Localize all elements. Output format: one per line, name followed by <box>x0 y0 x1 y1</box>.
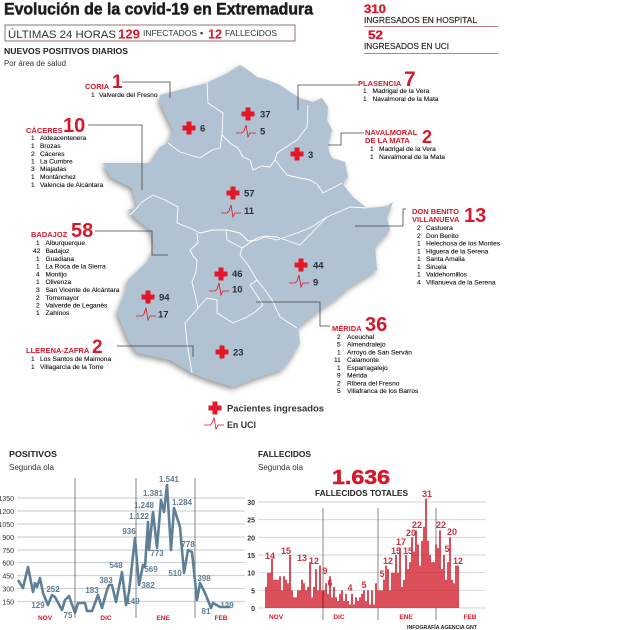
line chart: positives: 778 <box>181 540 195 549</box>
area: Navalmoral de la Mata: NAVALMORAL <box>365 128 418 137</box>
area: Mérida: Arroyo de San Serván <box>347 350 412 356</box>
area: Don Benito-Villanueva: 2 <box>417 233 421 240</box>
legend: Pacientes ingresados <box>227 404 324 414</box>
legend: En UCI <box>227 420 256 431</box>
area: Navalmoral de la Mata: 1 <box>370 146 374 153</box>
bar chart: deaths: 20 <box>247 535 255 542</box>
area: Don Benito-Villanueva: 1 <box>417 272 421 278</box>
bar chart: deaths: 17 <box>396 537 406 547</box>
line chart: positives <box>0 475 245 622</box>
area: Llerena-Zafra: Villagarcía de la Torre <box>40 364 104 371</box>
bar chart: deaths: FEB <box>464 614 477 621</box>
leader lines <box>88 82 406 357</box>
area: Mérida: 1 <box>337 350 341 356</box>
bar chart: deaths: NOV <box>269 614 284 621</box>
area: Plasencia: Navalmoral de la Mata <box>372 96 439 103</box>
total deaths callout: 1.636 <box>332 467 390 489</box>
area: Cáceres: 2 <box>31 151 35 158</box>
subtitle: daily new positives: NUEVOS POSITIVOS DIARIOS <box>4 47 129 56</box>
last 24 hours box: 12 <box>208 26 222 42</box>
line chart: positives: 398 <box>197 574 211 583</box>
area: Don Benito-Villanueva: 1 <box>417 240 421 248</box>
area: Don Benito-Villanueva <box>412 205 501 286</box>
area: Cáceres: Miajadas <box>40 166 67 173</box>
area: Coria: CORIA <box>85 82 110 91</box>
area: Plasencia: 1 <box>363 88 367 95</box>
line chart: positives: 936 <box>122 527 136 536</box>
area: Badajoz: BADAJOZ <box>31 230 68 239</box>
bar chart: deaths: 9 <box>322 566 328 576</box>
area: Badajoz: La Roca de la Sierra <box>46 264 106 270</box>
map markers: patients and ICU <box>136 108 324 358</box>
bar chart: deaths: 12 <box>309 556 319 566</box>
area: Badajoz: 3 <box>36 287 40 294</box>
map markers: patients and ICU: 37 <box>260 110 271 120</box>
bar chart: deaths: 0 <box>251 606 255 613</box>
area: Cáceres: Brozas <box>40 143 61 150</box>
area: Don Benito-Villanueva: Don Benito <box>426 233 459 240</box>
area: Don Benito-Villanueva: Higuera de la Serena <box>426 248 489 256</box>
area: Don Benito-Villanueva: DON BENITO <box>412 207 459 216</box>
line chart: positives: 510 <box>168 569 182 578</box>
bar chart: deaths: 6 <box>327 578 333 588</box>
line chart: positives: ENE <box>156 615 170 622</box>
area: Badajoz: 4 <box>36 272 40 278</box>
area: Navalmoral de la Mata: DE LA MATA <box>365 136 410 145</box>
bar chart: deaths: 14 <box>265 551 275 561</box>
area: Mérida: 9 <box>337 372 341 380</box>
bar chart: deaths: 15 <box>281 546 291 556</box>
line chart: positives: 569 <box>144 565 158 574</box>
area: Llerena-Zafra: 2 <box>92 337 103 358</box>
bar chart: deaths: 5 <box>444 544 450 554</box>
area: Don Benito-Villanueva: Siruela <box>426 264 447 271</box>
line chart: positives: 150 <box>2 600 14 606</box>
area: Llerena-Zafra: 1 <box>31 364 35 371</box>
area: Badajoz: 1 <box>36 279 40 286</box>
area: Coria: 1 <box>112 72 123 93</box>
map markers: patients and ICU: 17 <box>158 310 169 320</box>
bar chart: deaths: 5 <box>361 580 367 590</box>
bar chart: deaths: 30 <box>247 500 255 507</box>
line chart: positives: 773 <box>150 549 164 558</box>
area: Mérida: Almendralejo <box>347 342 386 348</box>
area: Badajoz <box>31 220 120 317</box>
area: Badajoz: 1 <box>36 240 40 247</box>
line chart: positives: 129 <box>31 601 45 610</box>
bar chart: deaths: 25 <box>247 518 255 525</box>
line chart: positives: 548 <box>109 561 123 570</box>
area: Navalmoral de la Mata: 2 <box>422 127 432 147</box>
area: Coria: 1 <box>91 92 95 99</box>
area: Cáceres: 1 <box>31 158 35 166</box>
line chart: positives: 129 <box>220 601 234 610</box>
line chart: positives: 252 <box>46 585 60 594</box>
area: Mérida: MÉRIDA <box>332 324 362 333</box>
area: Cáceres: CÁCERES <box>26 126 63 135</box>
line chart: positives: 750 <box>2 548 14 555</box>
area: Badajoz: Valverde de Leganés <box>46 302 108 310</box>
total deaths callout <box>315 467 409 498</box>
line chart: positives: 300 <box>2 586 14 594</box>
chart heading: positives: Segunda ola <box>9 462 54 472</box>
area: Badajoz: Badajoz <box>46 248 69 255</box>
bar chart: deaths: 31 <box>422 489 432 499</box>
hospital totals <box>364 4 498 54</box>
area: Plasencia: 7 <box>404 68 416 91</box>
bar chart: deaths: 12 <box>383 556 393 566</box>
area: Cáceres: 1 <box>31 135 35 142</box>
area: Don Benito-Villanueva: Villanueva de la Serena <box>426 280 496 286</box>
area: Badajoz: Guadiana <box>46 256 74 263</box>
line chart: positives: 81 <box>202 607 211 616</box>
area: Mérida: Ribera del Fresno <box>347 380 400 388</box>
line chart: positives: 450 <box>2 574 14 580</box>
area: Plasencia: Madrigal de la Vera <box>372 88 430 95</box>
area: Cáceres: 1 <box>31 143 35 150</box>
line chart: positives: NOV <box>38 615 53 622</box>
chart heading: deaths: FALLECIDOS <box>258 449 311 459</box>
map markers: patients and ICU: 46 <box>232 269 243 280</box>
area: Cáceres: 1 <box>31 182 35 189</box>
hospital totals: 310 <box>364 4 386 16</box>
area: Mérida: 2 <box>337 334 341 341</box>
map markers: patients and ICU: 23 <box>233 348 244 358</box>
area: Mérida: 2 <box>337 380 341 388</box>
last 24 hours box: FALLECIDOS <box>225 28 277 38</box>
line chart: positives: 1.248 <box>134 501 155 510</box>
bar chart: deaths: 15 <box>247 553 255 560</box>
area: Plasencia <box>358 68 439 103</box>
area: Mérida: Aceuchal <box>347 334 375 341</box>
area: Badajoz: 58 <box>71 220 93 242</box>
line chart: positives: 1.381 <box>143 489 164 498</box>
map markers: patients and ICU: 94 <box>159 292 170 304</box>
area: Cáceres: 3 <box>31 166 35 173</box>
area: Badajoz: Olivenza <box>46 279 71 286</box>
area: Don Benito-Villanueva: 2 <box>417 225 421 232</box>
map markers: patients and ICU: 9 <box>313 278 318 288</box>
area: Don Benito-Villanueva: Castuera <box>426 225 453 232</box>
area: Badajoz: Alburquerque <box>46 240 85 247</box>
line chart: positives: 382 <box>141 581 155 590</box>
map markers: patients and ICU: 6 <box>200 124 205 134</box>
area: Cáceres: 1 <box>31 174 35 181</box>
area: Plasencia: PLASENCIA <box>358 79 402 88</box>
area: Mérida: Mérida <box>347 372 367 380</box>
map markers: patients and ICU: 57 <box>244 188 255 200</box>
bar chart: deaths: 5 <box>251 588 255 595</box>
bar chart: deaths: 15 <box>391 546 401 556</box>
area: Cáceres: Cáceres <box>40 151 65 158</box>
area: Don Benito-Villanueva: VILLANUEVA <box>412 215 460 224</box>
area: Cáceres: Aldeacentenera <box>40 135 87 142</box>
hospital totals: 52 <box>368 30 383 42</box>
area: Mérida: 5 <box>337 342 341 348</box>
area: Mérida: Villafranca de los Barros <box>347 388 419 395</box>
map markers: patients and ICU: 44 <box>313 260 324 272</box>
bar chart: deaths: 22 <box>436 520 446 530</box>
title: Evolución de la covid-19 en Extremadura <box>4 0 314 18</box>
bar chart: deaths: 20 <box>447 527 457 537</box>
chart heading: deaths <box>258 449 311 472</box>
map markers: patients and ICU: 11 <box>244 206 255 217</box>
area: Mérida <box>332 314 419 395</box>
chart heading: positives <box>9 449 57 472</box>
area: Mérida: 1 <box>337 365 341 372</box>
last 24 hours box: 129 <box>118 26 140 42</box>
bar chart: deaths: 4 <box>347 583 353 593</box>
area: Mérida: 11 <box>334 357 341 364</box>
bar chart: deaths: 15 <box>403 546 413 556</box>
area: Cáceres: La Cumbre <box>40 158 73 166</box>
area: Llerena-Zafra: LLERENA-ZAFRA <box>26 346 90 355</box>
map markers: patients and ICU: 5 <box>260 126 266 138</box>
map markers: patients and ICU: 10 <box>232 284 243 296</box>
area: Don Benito-Villanueva: 1 <box>417 264 421 271</box>
area: Badajoz: Torremayor <box>46 295 80 302</box>
map of Extremadura <box>103 65 393 387</box>
bar chart: deaths: 22 <box>412 520 422 530</box>
area: Navalmoral de la Mata <box>365 127 445 161</box>
line chart: positives: 75 <box>64 611 73 620</box>
area: Cáceres: Valencia de Alcántara <box>40 182 104 189</box>
bar chart: deaths: 13 <box>297 553 307 563</box>
area: Don Benito-Villanueva: Santa Amalia <box>426 256 465 263</box>
total deaths callout: FALLECIDOS TOTALES <box>315 489 409 498</box>
area: Coria <box>85 72 158 99</box>
area: Don Benito-Villanueva: Valdehornillos <box>426 272 468 278</box>
bar chart: deaths: ENE <box>399 614 413 621</box>
area: Don Benito-Villanueva: 13 <box>464 205 486 227</box>
area: Mérida: 36 <box>365 314 387 336</box>
line chart: positives: 383 <box>99 576 113 585</box>
map markers: patients and ICU: 3 <box>308 150 313 161</box>
area: Badajoz: Montijo <box>46 272 67 278</box>
bar chart: deaths: DIC <box>333 614 345 621</box>
area: Navalmoral de la Mata: 1 <box>370 154 374 161</box>
last 24 hours box <box>5 25 295 42</box>
chart heading: deaths: Segunda ola <box>258 462 303 472</box>
area: Llerena-Zafra: 1 <box>31 356 35 363</box>
line chart: positives: DIC <box>100 615 112 622</box>
area: Mérida: 5 <box>337 388 341 395</box>
line chart: positives: 900 <box>2 535 14 542</box>
area: Cáceres: Montánchez <box>40 174 76 181</box>
hospital totals: INGRESADOS EN HOSPITAL <box>364 15 477 25</box>
line chart: positives: 1.284 <box>172 498 193 507</box>
bar chart: deaths: 10 <box>247 571 255 578</box>
line chart: positives: 149 <box>126 597 140 606</box>
area: Coria: Valverde del Fresno <box>99 92 158 99</box>
line chart: positives: 1.541 <box>159 475 180 484</box>
line chart: positives: FEB <box>214 615 228 622</box>
area: Mérida: Calamonte <box>347 357 379 364</box>
last 24 hours box: ÚLTIMAS 24 HORAS <box>8 28 116 41</box>
hospital totals: INGRESADOS EN UCI <box>364 41 449 51</box>
area: Plasencia: 1 <box>363 96 367 103</box>
subtitle: daily new positives <box>4 47 129 68</box>
area: Badajoz: 2 <box>36 295 40 302</box>
last 24 hours box: • <box>200 28 203 38</box>
line chart: positives: 1.122 <box>129 512 150 521</box>
area: Badajoz: 1 <box>36 310 40 317</box>
area: Don Benito-Villanueva: 1 <box>417 256 421 263</box>
area: Badajoz: 42 <box>33 248 41 255</box>
area: Navalmoral de la Mata: Navalmoral de la Mata <box>379 154 445 161</box>
line chart: positives: 183 <box>85 586 99 595</box>
area: Don Benito-Villanueva: Helechosa de los Montes <box>426 240 501 248</box>
subtitle: daily new positives: Por área de salud <box>4 59 66 68</box>
area: Badajoz: 1 <box>36 256 40 263</box>
last 24 hours box: INFECTADOS <box>143 28 197 38</box>
area: Badajoz: San Vicente de Alcántara <box>46 287 120 294</box>
bar chart: deaths: 20 <box>406 528 416 538</box>
line chart: positives: 600 <box>2 560 14 568</box>
area: Cáceres <box>26 115 104 189</box>
area: Navalmoral de la Mata: Madrigal de la Vera <box>379 146 436 153</box>
area: Badajoz: 2 <box>36 302 40 310</box>
bar chart: deaths: 5 <box>379 569 385 579</box>
legend <box>204 402 324 431</box>
area: Llerena-Zafra: Los Santos de Maimona <box>40 356 111 363</box>
area: Mérida: Esparragalejo <box>347 365 388 372</box>
area: Llerena-Zafra <box>26 337 111 371</box>
area: Badajoz: Zahínos <box>46 310 70 317</box>
bar chart: deaths: 12 <box>453 556 463 566</box>
bar chart: deaths <box>247 489 486 621</box>
area: Don Benito-Villanueva: 4 <box>417 280 421 286</box>
area: Don Benito-Villanueva: 1 <box>417 248 421 256</box>
chart heading: positives: POSITIVOS <box>9 449 57 459</box>
area: Cáceres: 10 <box>63 115 85 137</box>
area: Badajoz: 1 <box>36 264 40 270</box>
